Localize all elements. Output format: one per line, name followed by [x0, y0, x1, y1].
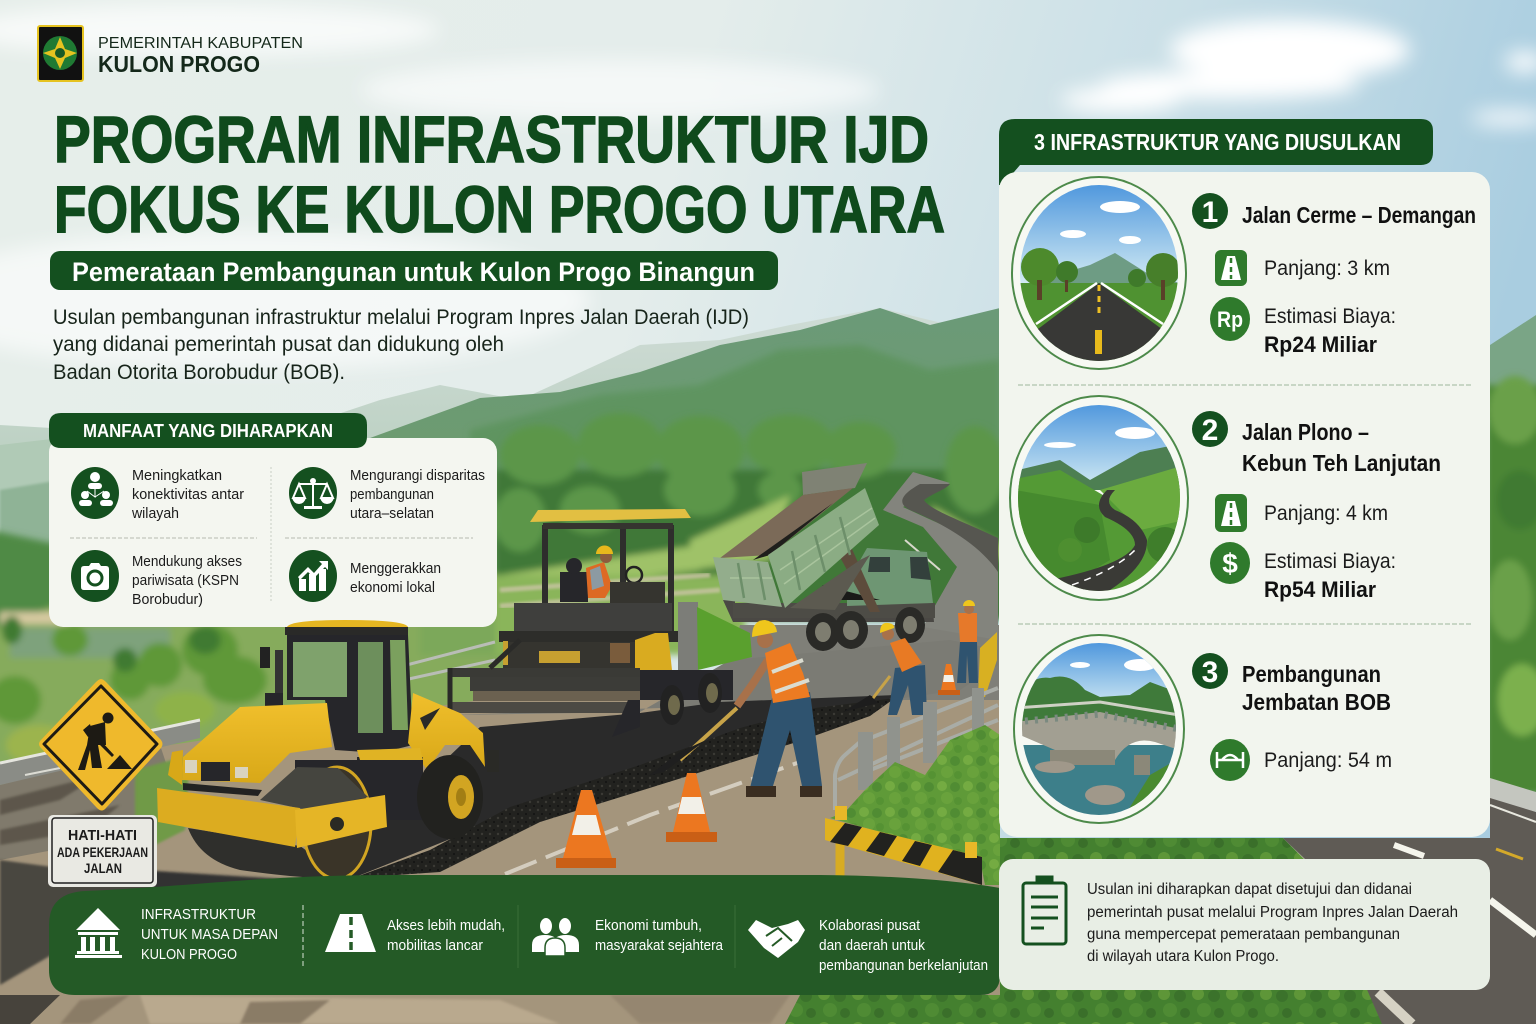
cost item: Rp54 Miliar: [1264, 577, 1376, 602]
cost item: $: [1222, 548, 1238, 579]
panel: closing note: [999, 859, 1490, 990]
warning board: ADA PEKERJAAN: [57, 845, 148, 860]
banner text: infrastruktur: UNTUK MASA DEPAN: [141, 926, 278, 943]
benefit: konektivitas: [71, 467, 244, 522]
illustration: steel guard rail: [835, 688, 998, 810]
title: PROGRAM INFRASTRUKTUR IJD: [54, 102, 929, 176]
step number 2: [1192, 411, 1228, 447]
intro paragraph: Usulan pembangunan infrastruktur melalui Program Inpres Jalan Daerah (IJD): [53, 306, 749, 329]
note text: pemerintah pusat melalui Program Inpres Jalan Daerah: [1087, 904, 1458, 921]
right strip trees: [1485, 376, 1536, 795]
intro paragraph: [53, 306, 749, 384]
intro paragraph: yang didanai pemerintah pusat dan didukung oleh: [53, 333, 504, 356]
warning board: JALAN: [84, 860, 122, 876]
cost item: [1210, 542, 1396, 602]
cost item: Rp24 Miliar: [1264, 332, 1377, 357]
banner text: kolaborasi: dan daerah untuk: [819, 938, 926, 954]
warning board: HATI-HATI: [68, 827, 137, 844]
benefit: pariwisata: pariwisata (KSPN: [132, 573, 239, 589]
icon: road: [325, 914, 376, 952]
panel heading: [49, 413, 367, 448]
left guard rail: [0, 720, 200, 785]
grey road surface: [450, 640, 998, 715]
length item: Panjang: 54 m: [1264, 749, 1392, 772]
project name: Kebun Teh Lanjutan: [1242, 450, 1441, 476]
foliage below panels: [1000, 838, 1305, 990]
icon: road work warning sign: [39, 679, 162, 810]
header: government name: PEMERINTAH KABUPATEN: [98, 35, 303, 52]
benefit: disparitas: Mengurangi disparitas: [350, 468, 485, 484]
photo: winding road through tea hills: [1010, 396, 1190, 600]
project 3: Pembangunan Jembatan BOB: [1014, 635, 1392, 823]
banner text: ekonomi: [595, 918, 724, 954]
header: government name: [98, 35, 303, 77]
length item: [1215, 494, 1388, 532]
banner text: kolaborasi: [819, 918, 988, 974]
benefit: konektivitas: wilayah: [131, 506, 179, 522]
note text: guna mempercepat pemerataan pembangunan: [1087, 926, 1400, 943]
cost item: Estimasi Biaya:: [1264, 550, 1396, 573]
icon: handshake: [748, 920, 805, 958]
length item: Panjang: 4 km: [1264, 502, 1388, 525]
photo: straight road: [1010, 177, 1190, 369]
panel heading: [999, 119, 1433, 185]
title: FOKUS KE KULON PROGO UTARA: [54, 172, 945, 246]
intro paragraph: Badan Otorita Borobudur (BOB).: [53, 361, 345, 384]
tree line behind paver and truck: [494, 413, 1005, 655]
illustration: traffic cones: [556, 664, 960, 868]
subtitle pill: Pemerataan Pembangunan untuk Kulon Progo Binangun: [72, 257, 755, 287]
worker: large, with shovel: [648, 620, 822, 797]
benefit: ekonomi lokal: Menggerakkan: [350, 561, 441, 577]
project 1: Jalan Cerme - Demangan: [1010, 177, 1476, 369]
ground: dirt shoulder and left road: [0, 700, 1000, 1024]
banner text: akses: [387, 918, 505, 954]
logo: Kabupaten Kulon Progo crest: [38, 26, 83, 81]
panel: 3 infrastruktur yang diusulkan: [999, 119, 1490, 837]
step number 1: [1192, 193, 1228, 229]
illustration: road workers: [648, 600, 997, 797]
icon: clipboard: [1023, 877, 1066, 944]
benefit: konektivitas: Meningkatkan: [132, 468, 222, 484]
length item: [1210, 739, 1392, 781]
banner text: infrastruktur: INFRASTRUKTUR: [141, 906, 256, 923]
illustration: striped road barrier: [825, 806, 982, 885]
benefit: ekonomi lokal: [289, 550, 441, 602]
benefit: konektivitas: konektivitas antar: [132, 487, 244, 503]
benefit: pariwisata: Borobudur): [132, 592, 203, 608]
banner text: infrastruktur: [141, 906, 278, 963]
note text: [1087, 881, 1458, 965]
illustration: asphalt paver: [450, 509, 752, 737]
far winding road: [723, 472, 998, 700]
benefit: ekonomi lokal: ekonomi lokal: [350, 580, 435, 596]
title: [54, 102, 945, 246]
banner text: akses: Akses lebih mudah,: [387, 918, 505, 934]
panel heading: MANFAAT YANG DIHARAPKAN: [83, 421, 333, 441]
banner text: ekonomi: Ekonomi tumbuh,: [595, 918, 702, 934]
illustration: road roller: [157, 620, 499, 879]
panel: manfaat yang diharapkan: [49, 413, 497, 627]
header: government name: KULON PROGO: [98, 51, 260, 77]
banner text: akses: mobilitas lancar: [387, 938, 483, 954]
banner text: kolaborasi: pembangunan berkelanjutan: [819, 958, 988, 974]
banner text: infrastruktur: KULON PROGO: [141, 946, 237, 963]
banner text: kolaborasi: Kolaborasi pusat: [819, 918, 920, 934]
step number 1: 1: [1202, 196, 1218, 229]
step number 3: [1192, 653, 1228, 689]
step number 2: 2: [1202, 414, 1218, 447]
project name: [1242, 419, 1441, 476]
icon: people: [532, 918, 579, 956]
icon: government building: [75, 908, 122, 958]
illustration: dump truck: [713, 463, 935, 651]
illustration: roadside bushes: [830, 725, 1000, 885]
length item: [1215, 250, 1390, 286]
cost item: [1210, 297, 1396, 357]
note text: di wilayah utara Kulon Progo.: [1087, 948, 1279, 965]
length item: Panjang: 3 km: [1264, 257, 1390, 280]
left fields and trees: [0, 530, 520, 810]
project name: Pembangunan: [1242, 661, 1381, 687]
photo: bridge over river: [1014, 635, 1185, 823]
worker: middle: [843, 623, 927, 715]
project name: Jalan Plono –: [1242, 419, 1369, 445]
project name: Jembatan BOB: [1242, 689, 1391, 715]
warning board: [48, 815, 157, 887]
benefit: pariwisata: [71, 550, 242, 608]
step number 3: 3: [1202, 656, 1218, 689]
right foreground highway: [1000, 838, 1536, 1024]
benefit: pariwisata: Mendukung akses: [132, 554, 242, 570]
banner text: ekonomi: masyarakat sejahtera: [595, 938, 724, 954]
project 2: Jalan Plono - Kebun Teh Lanjutan: [1010, 396, 1441, 602]
cost item: Estimasi Biaya:: [1264, 305, 1396, 328]
cost item: Rp: [1217, 307, 1243, 332]
project name: [1242, 661, 1391, 715]
panel heading: 3 INFRASTRUKTUR YANG DIUSULKAN: [1034, 129, 1401, 155]
worker: far: [957, 600, 978, 683]
note text: Usulan ini diharapkan dapat disetujui dan didanai: [1087, 881, 1412, 898]
fresh asphalt: [340, 695, 895, 878]
banner: future infrastructure: [49, 875, 1000, 995]
benefit: disparitas: pembangunan: [350, 487, 434, 503]
benefit: disparitas: utara–selatan: [350, 506, 434, 522]
benefit: disparitas: [289, 467, 485, 522]
project name: Jalan Cerme – Demangan: [1242, 202, 1476, 228]
